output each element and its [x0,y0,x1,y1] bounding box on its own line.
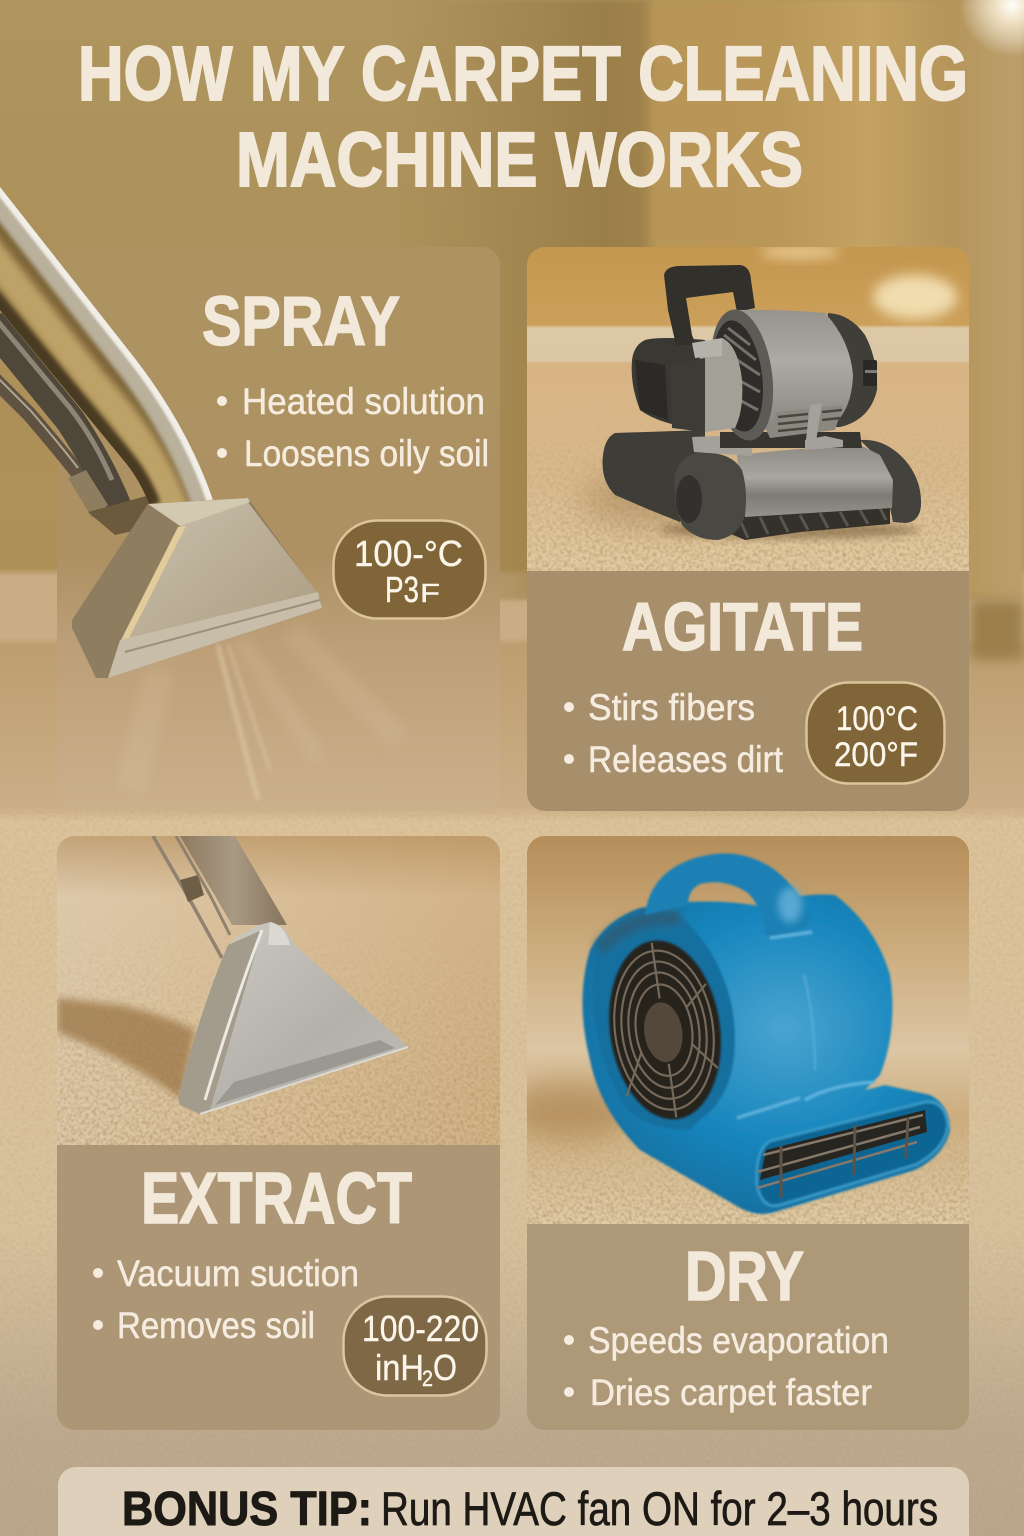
front wheel [674,453,746,540]
right cap [825,313,877,427]
badge: agitate temperature [806,682,944,784]
shadow [578,473,685,537]
cable [153,836,222,958]
heading: dry: DRY [685,1237,804,1315]
bullet list: agitate: Releases dirt [588,739,784,780]
motor cylinder [735,310,853,438]
badge: spray temperature: P3 [385,569,419,610]
badge: spray temperature [334,520,486,618]
fan grille [608,939,722,1121]
badge: suction range: O [433,1347,457,1388]
icon: spray wand and nozzle [0,170,322,678]
bullet list: dry [564,1320,889,1413]
right wheel [860,440,921,523]
image: extraction wand on carpet [57,836,500,1145]
rear box [632,338,706,424]
heading: spray: SPRAY [202,282,400,360]
badge: suction range [344,1296,486,1396]
bullet list: dry: Dries carpet faster [590,1372,872,1413]
heading: agitate: AGITATE [622,589,863,665]
callout: bonus tip [58,1467,969,1536]
bullet list: extract: Removes soil [117,1305,315,1346]
title: MACHINE WORKS [236,117,803,203]
bullet list: extract [93,1253,359,1346]
wand tube [180,836,287,925]
hoses [0,312,118,510]
badge: suction range: 100-220 [362,1308,479,1349]
panel: extract [57,836,500,1430]
badge: agitate temperature: 100°C [836,700,918,738]
motor end ring [712,310,774,440]
panel: agitate [527,245,969,811]
pipe [0,187,213,504]
bullet list: spray: Heated solution [242,381,485,422]
bullet list: agitate: Stirs fibers [588,687,755,728]
image: blue air mover on carpet [510,836,969,1224]
bullet list: extract: Vacuum suction [117,1253,359,1294]
outlet [757,1102,948,1206]
bullet list: spray [217,381,489,474]
badge: spray temperature: F [420,578,440,608]
head [178,922,408,1114]
brush [732,508,890,540]
bullet list: agitate [564,687,784,780]
nozzle head [72,498,322,678]
icon: spray mist [130,630,400,800]
handle [664,265,755,345]
heading: extract: EXTRACT [141,1159,412,1239]
panel: spray [57,247,500,811]
mounts [692,436,752,456]
title [78,31,968,203]
badge: suction range: inH [375,1347,424,1388]
image: agitator machine on carpet [527,245,969,571]
badge: spray temperature: 100-°C [354,533,463,574]
panel: dry [510,836,969,1430]
shadow [57,998,195,1100]
badge: suction range: 2 [422,1366,433,1391]
bullet list: dry: Speeds evaporation [588,1320,889,1361]
body [582,894,950,1214]
badge: agitate temperature: 200°F [834,736,918,774]
pump housing [700,338,742,432]
handle [645,854,812,936]
rear track [602,430,705,522]
callout: bonus tip: BONUS TIP: [122,1483,372,1536]
bullet list: spray: Loosens oily soil [244,433,489,474]
silver body [737,445,893,517]
